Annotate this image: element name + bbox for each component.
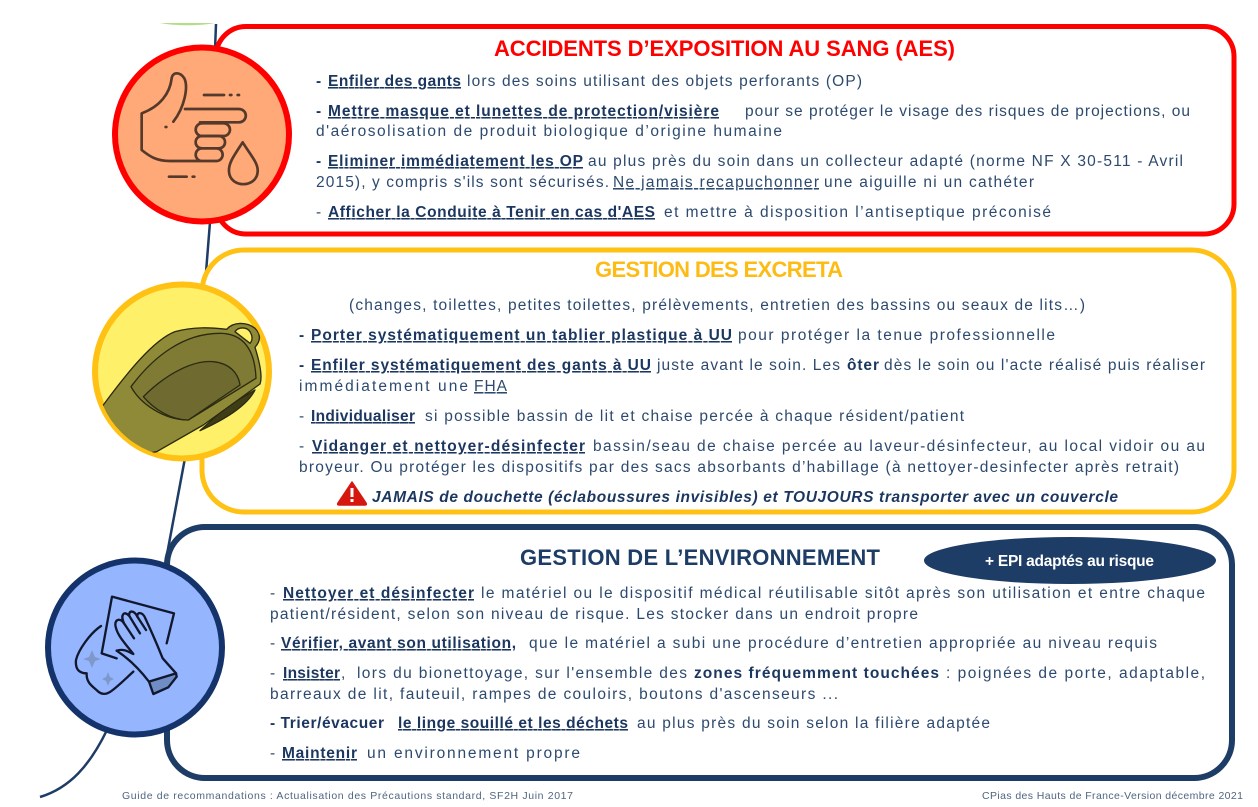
text block: AES instructions: pour se protéger le visage des risques de projections, ou: [745, 103, 1190, 120]
heading: excreta: GESTION DES EXCRETA: [595, 257, 843, 282]
text block: environment instructions: un environnement propre: [367, 745, 580, 762]
text block: excreta instructions: -: [299, 438, 304, 455]
text block: environment instructions: lors du bionettoyage, sur l'ensemble des: [357, 665, 687, 682]
text block: environment instructions: que le matériel a subi une procédure d’entretien appropriée au niveau requis: [529, 635, 1157, 652]
text block: environment instructions: -: [270, 635, 275, 652]
text block: environment instructions: le linge souillé et les déchets: [398, 715, 628, 732]
panel: gestion de l'environnement: [167, 527, 1232, 778]
text block: excreta instructions: bassin/seau de chaise percée au laveur-désinfecteur, au local vidoir ou au: [593, 438, 1205, 455]
text block: environment instructions: Nettoyer et désinfecter: [283, 585, 474, 602]
text block: excreta instructions: -: [299, 327, 304, 344]
text block: AES instructions: Eliminer immédiatement les OP: [328, 153, 583, 170]
text block: environment instructions: Maintenir: [282, 745, 357, 762]
text block: AES instructions: -: [316, 153, 321, 170]
text block: excreta instructions: si possible bassin de lit et chaise percée à chaque résident/patient: [425, 408, 965, 425]
text block: AES instructions: 2015), y compris s'ils sont sécurisés.: [316, 174, 609, 191]
text block: environment instructions: le matériel ou le dispositif médical réutilisable sitôt après son utilisation et entre chaque: [481, 585, 1205, 602]
text block: environment instructions: Insister: [283, 665, 340, 682]
heading: AES: ACCIDENTS D’EXPOSITION AU SANG (AES): [494, 36, 955, 61]
text block: AES instructions: [316, 73, 1190, 221]
text block: environment instructions: - Trier/évacuer: [270, 715, 384, 732]
text block: environment instructions: barreaux de lit, fauteuil, rampes de couloirs, boutons d'ascenseurs ...: [270, 686, 838, 703]
text block: environment instructions: zones fréquemment touchées: [694, 665, 939, 682]
text block: excreta instructions: -: [299, 357, 304, 374]
text block: excreta instructions: FHA: [474, 378, 508, 395]
text block: excreta instructions: (changes, toilettes, petites toilettes, prélèvements, entretien des bassins ou seaux de lits…): [349, 297, 1085, 314]
badge: EPI: [924, 537, 1216, 584]
text block: AES instructions: -: [316, 204, 321, 221]
timeline curve: [40, 24, 216, 797]
text block: environment instructions: ,: [341, 665, 345, 682]
text block: AES instructions: -: [316, 103, 321, 120]
icon: warning triangle: [338, 482, 366, 505]
text block: AES instructions: d'aérosolisation de produit biologique d’origine humaine: [316, 123, 782, 140]
text block: environment instructions: [270, 585, 1205, 762]
text block: excreta instructions: broyeur. Ou protéger les dispositifs par des sacs absorbants d’habillage (à nettoyer-desinfecter après retrait): [299, 459, 1179, 476]
heading: environnement: GESTION DE L’ENVIRONNEMENT: [520, 545, 881, 570]
text block: AES instructions: Enfiler des gants: [328, 73, 461, 90]
text block: AES instructions: Afficher la Conduite à Tenir en cas d'AES: [328, 204, 655, 221]
text block: excreta instructions: Individualiser: [311, 408, 415, 425]
text block: environment instructions: au plus près du soin selon la filière adaptée: [637, 715, 990, 732]
text block: AES instructions: et mettre à disposition l’antiseptique préconisé: [664, 204, 1051, 221]
text block: environment instructions: patient/résident, selon son niveau de risque. Les stocker dans un endroit propre: [270, 606, 918, 623]
text block: AES instructions: lors des soins utilisant des objets perforants (OP): [467, 73, 862, 90]
icon: bedpan: [80, 284, 269, 463]
text block: excreta instructions: pour protéger la tenue professionnelle: [738, 327, 1055, 344]
text block: excreta instructions: juste avant le soin. Les: [656, 357, 840, 374]
text block: excreta instructions: immédiatement une: [299, 378, 468, 395]
text block: environment instructions: -: [270, 745, 275, 762]
panel: accidents d'exposition au sang: [216, 26, 1234, 234]
text block: AES instructions: Mettre masque et lunettes de protection/visière: [328, 103, 719, 120]
footer: credit: CPias des Hauts de France-Version décembre 2021: [982, 790, 1243, 802]
text block: AES instructions: -: [316, 73, 321, 90]
warning message: JAMAIS de douchette (éclaboussures invisibles) et TOUJOURS transporter avec un couvercle: [372, 489, 1118, 506]
text block: environment instructions: -: [270, 665, 275, 682]
text block: AES instructions: au plus près du soin dans un collecteur adapté (norme NF X 30-511 - Avril: [588, 153, 1183, 170]
text block: environment instructions: -: [270, 585, 275, 602]
panel: gestion des excreta: [202, 250, 1234, 512]
text block: AES instructions: une aiguille ni un cathéter: [824, 174, 1034, 191]
text block: AES instructions: Ne jamais recapuchonner: [613, 174, 819, 191]
icon: gloved hand wiping with cloth: [48, 560, 222, 734]
text block: excreta instructions: ôter: [847, 357, 879, 374]
top green tab fragment: [160, 23, 215, 25]
text block: excreta instructions: dès le soin ou l'acte réalisé puis réaliser: [884, 357, 1205, 374]
text block: environment instructions: : poignées de porte, adaptable,: [946, 665, 1205, 682]
text block: excreta instructions: [299, 297, 1205, 476]
badge: EPI: + EPI adaptés au risque: [985, 553, 1154, 570]
text block: excreta instructions: Enfiler systématiquement des gants à UU: [311, 357, 651, 374]
text block: excreta instructions: -: [299, 408, 304, 425]
text block: excreta instructions: Porter systématiquement un tablier plastique à UU: [311, 327, 732, 344]
text block: excreta instructions: Vidanger et nettoyer-désinfecter: [312, 438, 585, 455]
footer: source: Guide de recommandations : Actualisation des Précautions standard, SF2H Juin 2017: [122, 790, 573, 802]
text block: environment instructions: Vérifier, avant son utilisation,: [281, 635, 516, 652]
icon: hand with blood drop: [115, 48, 289, 222]
